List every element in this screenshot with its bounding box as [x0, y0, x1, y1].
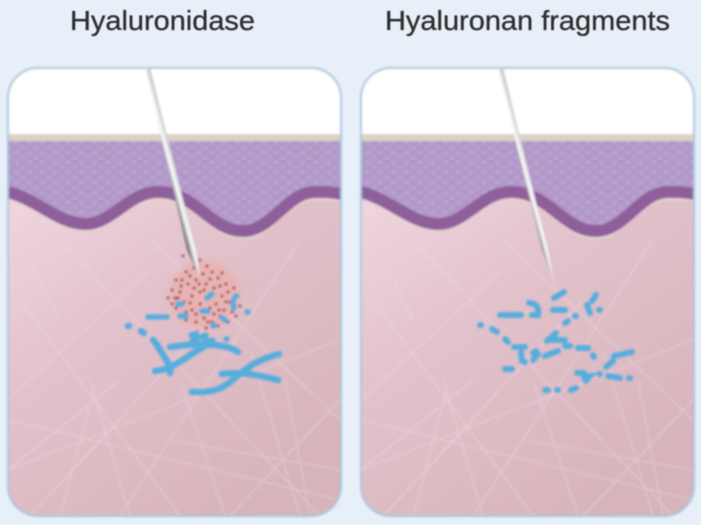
- basal layer: [361, 192, 694, 231]
- title: Hyaluronan fragments: Hyaluronan fragments: [385, 5, 670, 36]
- air above skin: [8, 68, 341, 138]
- air above skin: [361, 68, 694, 138]
- epidermis: [8, 140, 341, 226]
- dermis: [8, 193, 341, 516]
- title: Hyaluronidase: Hyaluronidase: [70, 5, 255, 36]
- hyaluronan fragments: [480, 292, 632, 390]
- panel: hyaluronidase injection: [8, 68, 341, 516]
- hyaluronidase droplets: [168, 256, 240, 332]
- dermal junction edge: [361, 199, 694, 238]
- hyaluronan strands: [128, 317, 279, 392]
- panel: hyaluronan fragments: [361, 68, 694, 516]
- hyaluronan fragments among droplets: [178, 294, 248, 335]
- panel border: [361, 68, 694, 516]
- needle: [498, 68, 554, 282]
- epidermis: [361, 140, 694, 226]
- dermis fibres: [10, 326, 334, 514]
- needle: [145, 68, 200, 280]
- panel border: [8, 68, 341, 516]
- droplet halo: [170, 261, 240, 329]
- dermis: [361, 193, 694, 516]
- dermal junction edge: [8, 199, 341, 238]
- stratum corneum: [361, 134, 694, 141]
- basal layer: [8, 192, 341, 231]
- dermis fibres: [363, 307, 687, 514]
- stratum corneum: [8, 134, 341, 141]
